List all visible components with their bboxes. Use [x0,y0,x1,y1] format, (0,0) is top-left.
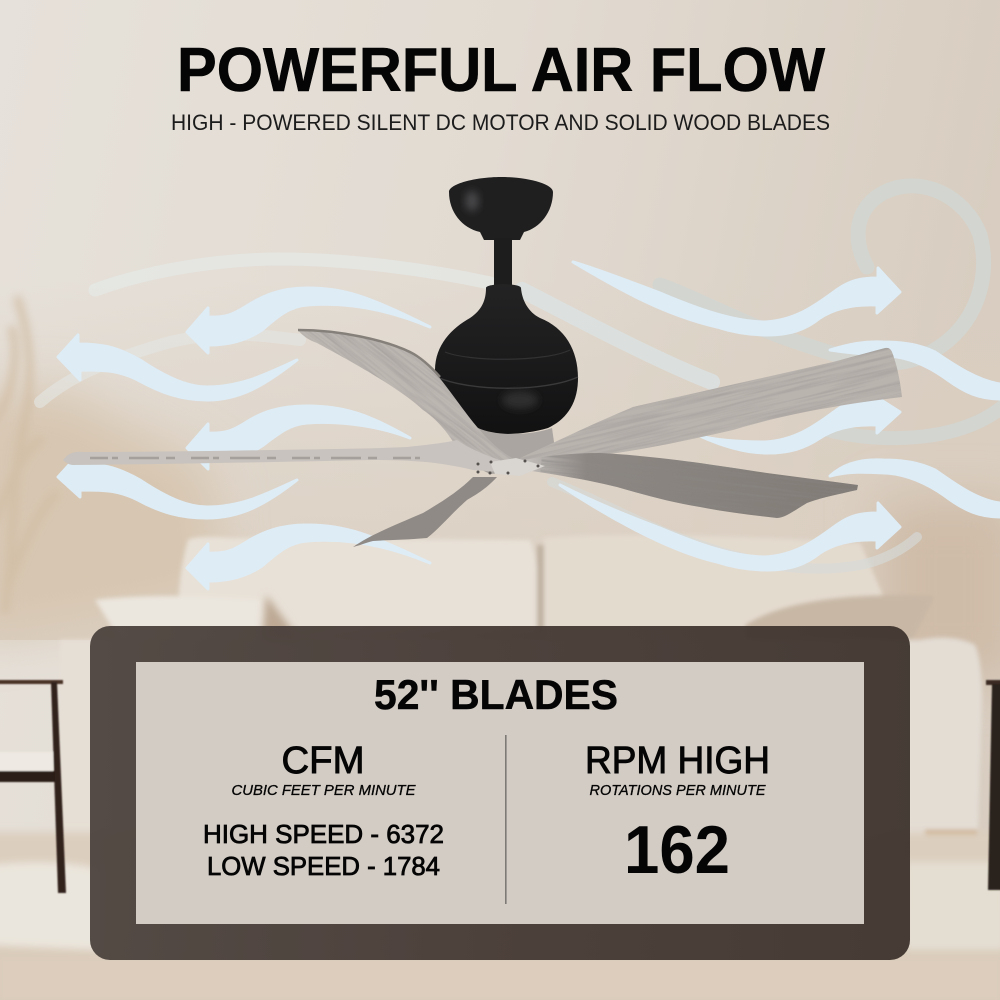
CFM subheading: CUBIC FEET PER MINUTE [232,783,416,799]
fan blades [63,328,902,547]
arrow: upper right [573,262,900,335]
blade: upper left [298,328,512,460]
column: RPM [585,740,770,888]
blade: long right [520,348,902,459]
right chair [986,680,1000,890]
divider [505,735,507,904]
fan canopy [449,177,553,240]
subtitle: HIGH - POWERED SILENT DC MOTOR AND SOLID WOOD BLADES [171,110,830,135]
RPM subheading: ROTATIONS PER MINUTE [590,783,766,799]
arrow: lower right [560,485,900,570]
arrow: right edge upper [830,342,1000,399]
airflow arrows: right side [560,262,1000,570]
ceiling fan [63,177,902,547]
arrow: far left upper [58,335,297,400]
title: POWERFUL AIR FLOW [177,36,825,105]
CFM heading: CFM [282,740,364,782]
heading: blades: 52'' BLADES [374,671,618,718]
blade: lower right [526,453,858,518]
blade: lower left [353,477,497,547]
high speed value: HIGH SPEED - 6372 [203,819,444,849]
faded air trails and swirl [40,186,1000,569]
RPM heading: RPM HIGH [585,740,770,782]
arrow: upper left [187,288,430,353]
airflow arrows: left side [58,288,430,589]
arrow: lower left [187,525,430,589]
fan hub [470,428,556,474]
arrow: far left lower [58,455,297,518]
pampas grass [0,300,55,610]
sofa cushions [60,535,982,850]
spec panel card [136,662,864,924]
arrow: middle left [187,406,410,469]
left chair [0,680,66,893]
fan downrod [494,238,512,288]
low speed value: LOW SPEED - 1784 [207,851,440,881]
column: CFM [203,740,444,881]
RPM value: 162 [624,812,730,888]
hub centre plate [476,458,545,476]
floor and rug [0,832,1000,1000]
arrow: right edge lower [830,460,1000,517]
cushion shadow [262,595,300,640]
fan motor housing [435,284,578,434]
spec panel frame [90,626,910,960]
blade: long left [63,440,505,472]
arrow: middle right [700,398,900,453]
